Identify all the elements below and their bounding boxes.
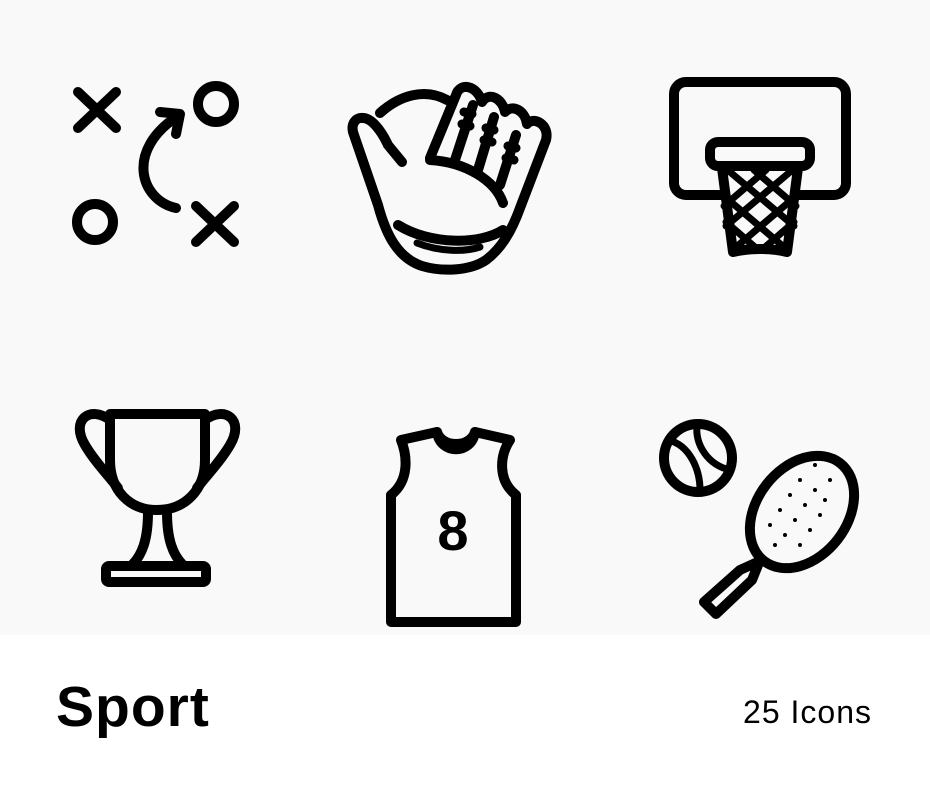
icon: baseball glove [353, 87, 547, 270]
icon: jersey [391, 432, 516, 622]
icon: basketball hoop [674, 82, 846, 252]
title: Sport [56, 675, 210, 739]
icon: tennis [664, 424, 876, 614]
icon count: 25 Icons [743, 694, 872, 730]
icon: jersey: 8 [437, 499, 469, 562]
icon: trophy [80, 414, 235, 582]
icon: play diagram [77, 86, 234, 242]
